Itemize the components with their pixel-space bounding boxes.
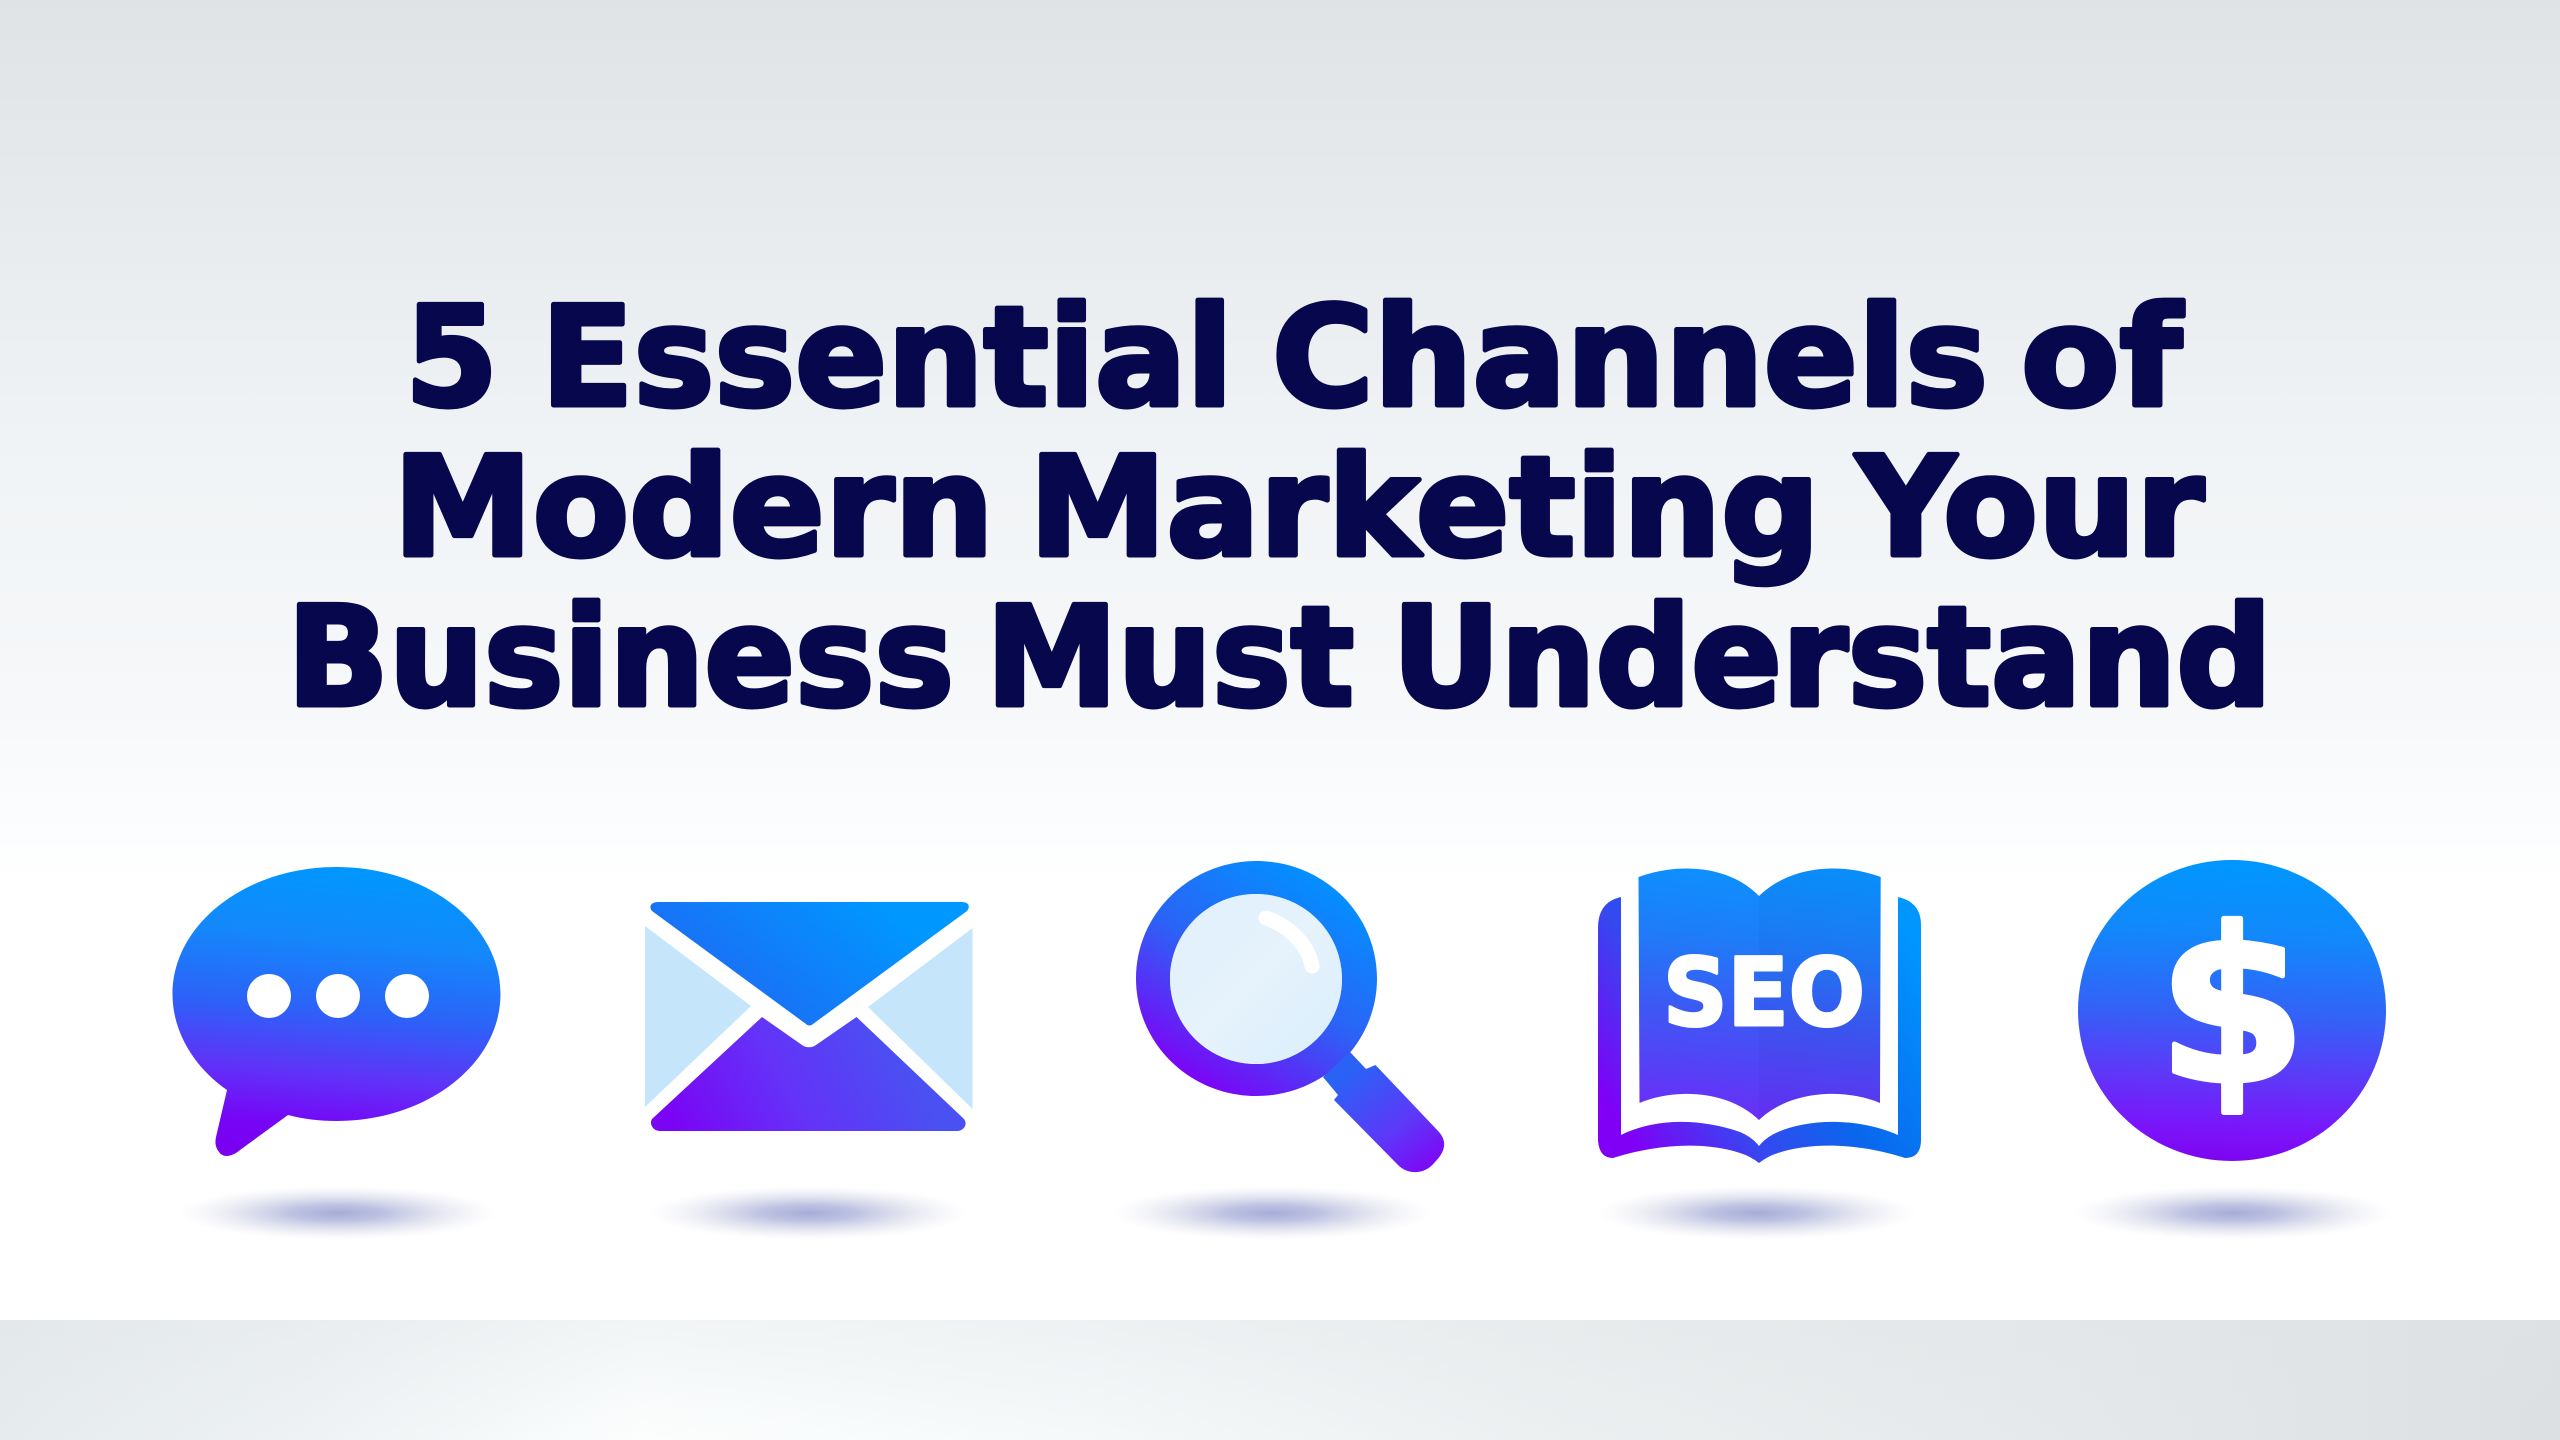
title: Understand <box>1392 577 2272 738</box>
icon: envelope <box>645 902 972 1131</box>
title: Business <box>287 577 954 738</box>
dollar sign: $ <box>2158 883 2306 1132</box>
icon: dollar coin <box>2078 860 2386 1161</box>
title: Modern <box>393 427 994 588</box>
chat dots <box>247 974 429 1018</box>
title: Marketing <box>1029 427 1820 588</box>
book pages <box>1638 869 1881 1120</box>
title: 5 <box>405 277 498 438</box>
right page shade <box>1759 869 1881 1120</box>
title: Must <box>986 577 1354 738</box>
icon: chat bubble <box>172 867 500 1156</box>
title: Essential <box>541 277 1233 438</box>
SEO label: SEO <box>1663 939 1865 1048</box>
title: Your <box>1854 427 2204 588</box>
lens highlight <box>1266 918 1312 966</box>
footer band <box>0 1320 2560 1440</box>
title <box>287 277 2272 738</box>
title: Channels <box>1272 277 1988 438</box>
lens <box>1170 894 1342 1064</box>
title: of <box>2021 277 2184 438</box>
handle <box>1323 1052 1444 1172</box>
icon: SEO book <box>1598 869 1921 1163</box>
book cover <box>1598 897 1921 1163</box>
icon ground shadows <box>178 1186 2393 1240</box>
icon: magnifying glass <box>1136 861 1444 1172</box>
